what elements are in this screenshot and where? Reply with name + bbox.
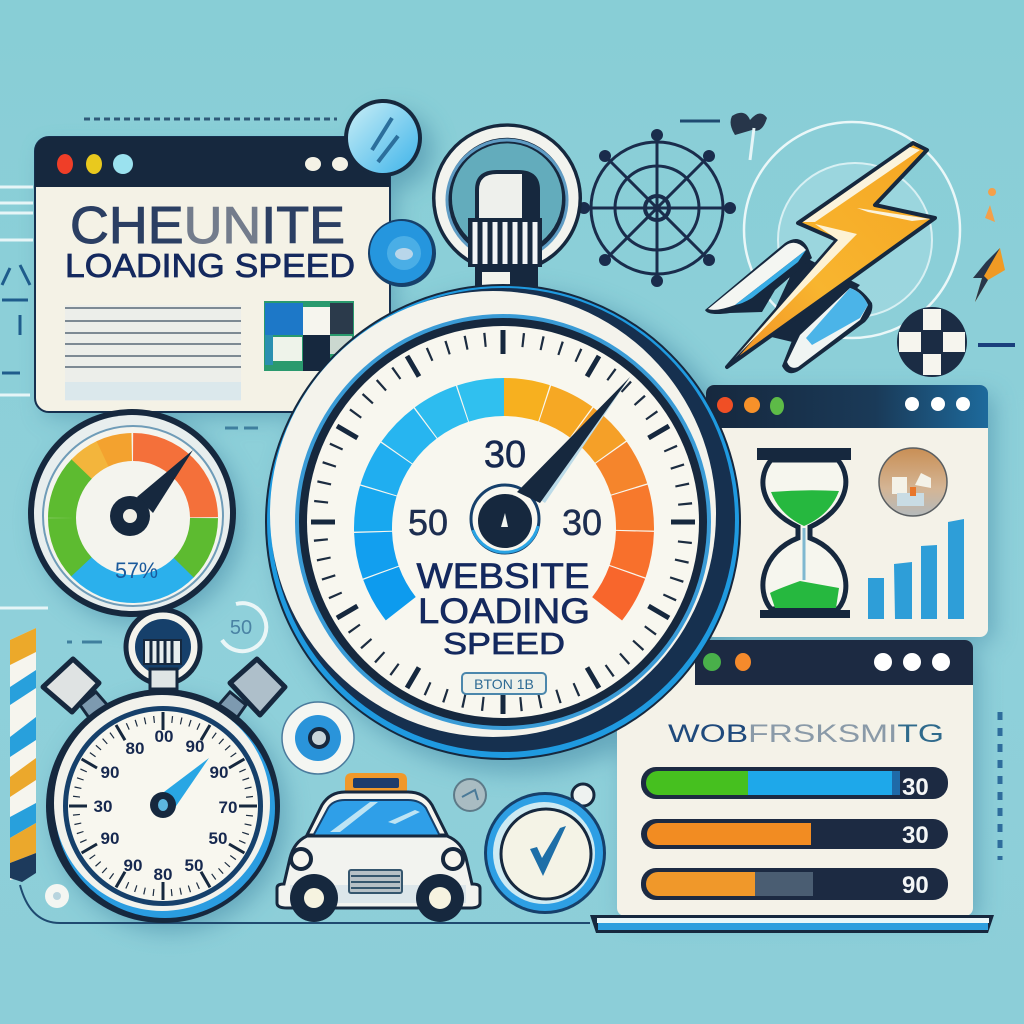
- heading: website loading speed: LOADING: [418, 592, 590, 631]
- icon: checkmark stopwatch: [484, 784, 606, 914]
- icon: small lightning: [973, 188, 1005, 302]
- progress bar 2: [641, 819, 948, 849]
- heading: website loading speed: [416, 557, 590, 661]
- progress bar 1: [641, 767, 948, 801]
- panel: bottom-right browser window: [590, 640, 994, 933]
- icon: checker block: [264, 301, 354, 371]
- gauge value 30 right: 30: [562, 502, 602, 543]
- needle: [471, 377, 630, 553]
- progress bar 2: 30: [902, 822, 929, 849]
- dial numbers: 80: [154, 865, 172, 884]
- chart: left gauge: [28, 409, 236, 618]
- heading: website loading speed: WEBSITE: [416, 557, 590, 596]
- icon: checker ball: [897, 307, 1015, 377]
- soft shadows: [38, 112, 993, 931]
- blue arc: [320, 344, 688, 712]
- dial numbers: 90: [186, 737, 204, 756]
- chart: main stopwatch gauge: [266, 285, 740, 759]
- heading: loading speed: LOADING SPEED: [65, 247, 355, 284]
- dial numbers: 90: [101, 763, 119, 782]
- orange arc: [321, 345, 687, 711]
- icon: left striped ribbon: [10, 628, 590, 923]
- stopwatch top knob: [126, 610, 200, 689]
- laptop base: [590, 915, 994, 933]
- heading: web title: WOB FRSKSMI TG: [668, 720, 944, 748]
- tick marks: [311, 330, 695, 714]
- dial numbers: 50: [209, 829, 227, 848]
- progress bar 3: [641, 868, 948, 900]
- panel: right browser window: [706, 385, 988, 637]
- heading: website loading speed: SPEED: [443, 626, 565, 661]
- gauge value 50 left: 50: [408, 502, 448, 543]
- icon: lightning bolt: [727, 143, 935, 367]
- gauge value 30 top: 30: [484, 434, 526, 476]
- progress bar 3: 90: [902, 872, 929, 899]
- text lines placeholder: [65, 305, 241, 401]
- icon: hourglass: [757, 448, 851, 618]
- dial numbers: 90: [124, 856, 142, 875]
- needle: [156, 758, 209, 812]
- icon: doodle top right: [680, 113, 767, 160]
- icon: small circle marker: [45, 884, 69, 908]
- icon: small 50 badge: 50: [230, 617, 252, 639]
- dial numbers: 80: [126, 739, 144, 758]
- icon: small 50 badge: [222, 603, 266, 651]
- dial numbers: 70: [219, 798, 237, 817]
- dial numbers: 90: [210, 763, 228, 782]
- icon: taxi car: [277, 773, 480, 922]
- icon: target button: [282, 702, 354, 774]
- icon: ship wheel: [578, 129, 736, 287]
- dial numbers: [94, 727, 237, 884]
- icon: rocket fins: [705, 239, 872, 373]
- bar chart: [868, 519, 964, 619]
- dial numbers: 50: [185, 856, 203, 875]
- icon: medal: [879, 448, 947, 516]
- small label: BTON 1B: [474, 676, 534, 692]
- progress bar 1: 30: [902, 774, 929, 801]
- stopwatch side buttons: [43, 659, 285, 722]
- dial numbers: 00: [155, 727, 173, 746]
- needle: [137, 450, 193, 513]
- dial numbers: 90: [101, 829, 119, 848]
- icon: bolt nut: [454, 779, 486, 811]
- dial numbers: 30: [94, 797, 112, 816]
- top-left decorative lines: [0, 119, 1000, 860]
- chart: small stopwatch: [43, 610, 285, 923]
- icon: blue round button: [368, 219, 436, 287]
- heading: window title: CHEUNITE: [70, 197, 345, 255]
- icon: halo behind lightning: [744, 122, 960, 338]
- gauge label: 57%: [115, 558, 158, 583]
- icon: stopwatch crown ring: [441, 132, 573, 290]
- icon: glass button top: [344, 99, 422, 177]
- small label: [462, 673, 546, 694]
- panel: top-left browser window: [35, 137, 390, 412]
